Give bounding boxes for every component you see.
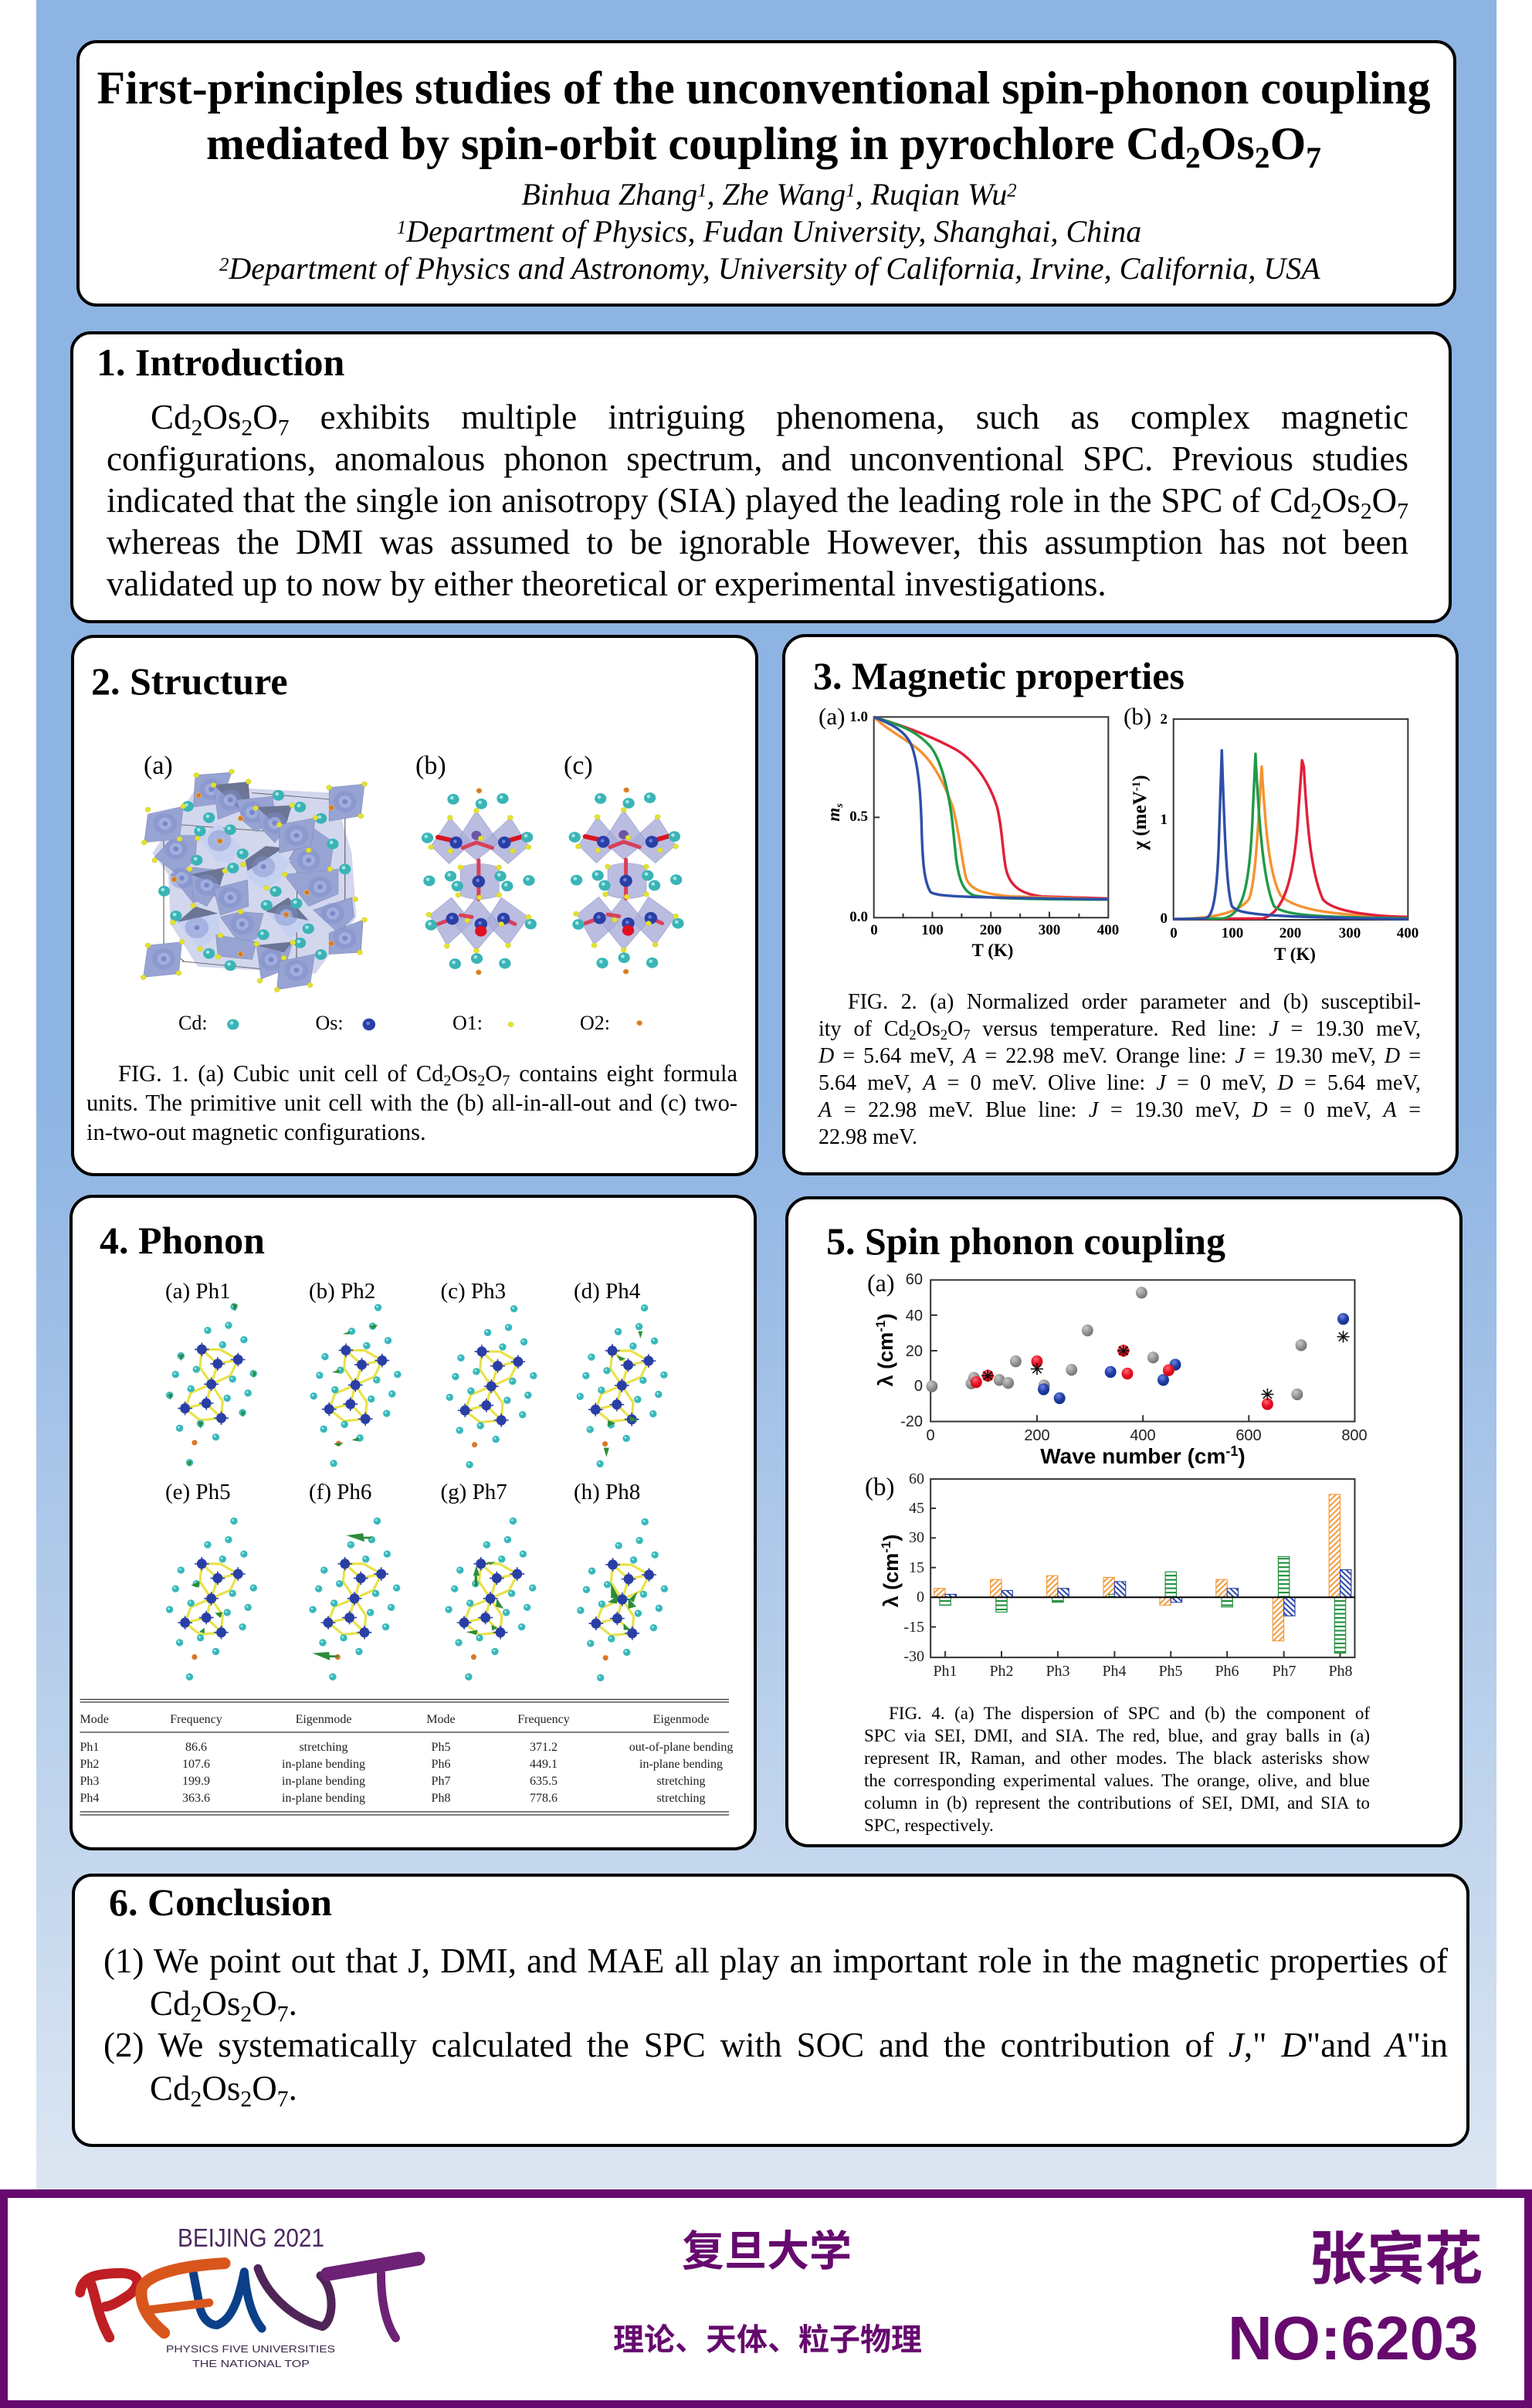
caption: figure 4: represent IR, Raman, and other modes. The black asterisks show [864,1748,1370,1768]
table: phonon modes: Ph6 [432,1758,450,1771]
table: phonon modes: Ph4 [80,1792,99,1805]
subfigure labels: (c) [564,751,593,780]
legend: atom species: Os: [315,1012,344,1034]
caption: figure 2: D = 5.64 meV, A = 22.98 meV. Orange line: J = 19.30 meV, D = [819,1044,1421,1068]
chart: normalized order parameter (a): 1.0 [849,709,868,725]
text block: conclusion items: Cd2Os2O7. [150,2069,297,2111]
figure: eight phonon mode structures: (a) Ph1 [165,1279,231,1304]
caption: figure 2: 5.64 meV, A = 0 meV. Olive line: J = 0 meV, D = 5.64 meV, [819,1071,1421,1095]
chart: normalized order parameter (a): 100 [921,922,944,938]
caption: figure 2: FIG. 2. (a) Normalized order parameter and (b) susceptibil- [848,990,1421,1014]
chart: SPC dispersion scatter (a) [867,1269,1368,1468]
caption: figure 4: SPC via SEI, DMI, and SIA. The red, blue, and gray balls in (a) [864,1726,1370,1745]
chart: SPC components bar chart (b): Ph6 [1215,1663,1239,1680]
chart: susceptibility (b): T (K) [1274,945,1316,964]
caption: figure 2: 22.98 meV. [819,1125,917,1149]
table: phonon modes: Ph5 [432,1741,450,1754]
chart: SPC dispersion scatter (a): ) [874,1314,897,1321]
chart: susceptibility (b): 200 [1279,925,1301,941]
chart: normalized order parameter (a): 0.0 [849,909,868,925]
panel: title [76,40,1456,307]
chart: SPC dispersion scatter (a): Wave number (cm [1040,1444,1225,1468]
chart: normalized order parameter (a) [819,703,1119,960]
heading: poster title [97,63,1431,175]
chart: normalized order parameter (a): T (K) [972,941,1013,960]
chart: normalized order parameter (a): 300 [1039,922,1060,938]
figure: eight phonon mode structures [165,1279,668,1681]
chart: SPC dispersion scatter (a): 60 [906,1271,923,1288]
text: university name: 复旦大学 [682,2227,852,2275]
chart: susceptibility (b) [1124,703,1418,964]
caption: figure 2: A = 22.98 meV. Blue line: J = 19.30 meV, D = 0 meV, A = [819,1098,1421,1122]
chart: SPC components bar chart (b) [865,1470,1354,1680]
text: poster number: NO:6203 [1228,2304,1479,2372]
table: phonon modes: Eigenmode [296,1713,351,1726]
table: phonon modes: 778.6 [530,1792,558,1805]
text block: introduction body: indicated that the single ion anisotropy (SIA) played the leading role in the SPC of Cd2Os2O7 [107,481,1408,524]
caption: figure 4: SPC, respectively. [864,1816,994,1835]
chart: SPC components bar chart (b): Ph5 [1158,1663,1183,1680]
caption: figure 2 [817,990,1421,1149]
logo: PFUNT Beijing 2021: PHYSICS FIVE UNIVERSITIES [166,2343,335,2355]
subfigure labels [144,751,593,780]
table: phonon modes: stretching [656,1792,706,1805]
figure: eight phonon mode structures: (h) Ph8 [574,1480,640,1504]
chart: SPC dispersion scatter (a): 0 [914,1378,923,1395]
chart: SPC components bar chart (b): Ph3 [1046,1663,1070,1680]
text block: introduction body [107,398,1408,603]
text block: conclusion items: (2) We systematically calculated the SPC with SOC and the contribution of J," D"and A"in [103,2026,1448,2064]
chart: SPC components bar chart (b): Ph1 [933,1663,958,1680]
caption: figure 1: FIG. 1. (a) Cubic unit cell of Cd2Os2O7 contains eight formula [118,1060,737,1090]
table: phonon modes: in-plane bending [639,1758,723,1771]
text block: conclusion items: Cd2Os2O7. [150,1984,297,2026]
chart: normalized order parameter (a): 400 [1097,922,1119,938]
table: phonon modes: 107.6 [182,1758,210,1771]
chart: SPC components bar chart (b): ) [880,1535,903,1541]
legend: atom species: O1: [452,1012,483,1034]
figure: eight phonon mode structures: (b) Ph2 [309,1279,375,1304]
caption: figure 2: ity of Cd2Os2O7 versus temperature. Red line: J = 19.30 meV, [819,1017,1421,1043]
logo: PFUNT Beijing 2021 [80,2223,419,2369]
chart: susceptibility (b): 1 [1160,812,1168,828]
logo: PFUNT Beijing 2021: BEIJING 2021 [178,2223,324,2252]
table: phonon modes: 86.6 [185,1741,207,1754]
panel: structure [71,635,758,1176]
table: phonon modes: in-plane bending [282,1775,365,1788]
chart: SPC components bar chart (b): Ph4 [1102,1663,1127,1680]
chart: SPC components bar chart (b): 0 [917,1589,924,1606]
chart: normalized order parameter (a): 0.5 [849,809,868,825]
chart: SPC dispersion scatter (a): ) [1238,1444,1246,1468]
figure: cubic unit cell (a) [141,769,368,992]
panel: magnetic properties [782,634,1459,1175]
chart: SPC components bar chart (b): Ph7 [1272,1663,1296,1680]
table: phonon modes: stretching [656,1775,706,1788]
text block: authors and affiliations: 1Department of Physics, Fudan University, Shanghai, China [397,214,1141,249]
panel: introduction [70,331,1452,623]
table: phonon modes: in-plane bending [282,1758,365,1771]
text block: authors and affiliations [219,177,1320,286]
figure: two-in-two-out configuration (c) [569,788,684,974]
heading: 3. Magnetic properties: 3. Magnetic properties [813,654,1185,697]
chart: SPC dispersion scatter (a): 20 [906,1343,923,1360]
table: phonon modes [80,1699,733,1815]
table: phonon modes: stretching [299,1741,348,1754]
text block: conclusion items: (1) We point out that J, DMI, and MAE all play an important role in the magnetic properties of [103,1942,1448,1980]
legend: atom species: O2: [580,1012,610,1034]
figure: eight phonon mode structures: (d) Ph4 [574,1279,641,1304]
figure: eight phonon mode structures: (e) Ph5 [165,1480,231,1504]
caption: figure 4 [864,1704,1370,1835]
caption: figure 4: FIG. 4. (a) The dispersion of SPC and (b) the component of [889,1704,1370,1723]
chart: susceptibility (b): 300 [1339,925,1361,941]
table: phonon modes: in-plane bending [282,1792,365,1805]
caption: figure 4: column in (b) represent the contributions of SEI, DMI, and SIA to [864,1793,1370,1813]
panel: footer [0,2189,1532,2408]
table: phonon modes: Ph3 [80,1775,99,1788]
figure: all-in-all-out configuration (b) [422,789,537,975]
table: phonon modes: Frequency [170,1713,222,1726]
chart: SPC dispersion scatter (a): -20 [900,1413,923,1430]
chart: SPC dispersion scatter (a): 200 [1024,1427,1050,1444]
chart: SPC components bar chart (b): 30 [909,1529,924,1546]
chart: normalized order parameter (a): m [824,808,843,822]
heading: 6. Conclusion: 6. Conclusion [109,1881,332,1924]
legend: atom species: Cd: [178,1012,208,1034]
figure: eight phonon mode structures: (g) Ph7 [440,1480,507,1504]
caption: figure 1 [86,1060,737,1145]
chart: SPC components bar chart (b): λ (cm [880,1553,903,1607]
chart: susceptibility (b): ) [1130,775,1151,782]
table: phonon modes: Ph1 [80,1741,99,1754]
table: phonon modes: Frequency [517,1713,570,1726]
legend: atom species [178,1012,642,1034]
chart: normalized order parameter (a): (a) [819,703,845,730]
table: phonon modes: Mode [426,1713,456,1726]
caption: figure 1: units. The primitive unit cell with the (b) all-in-all-out and (c) two- [86,1090,737,1116]
table: phonon modes: 449.1 [530,1758,558,1771]
heading: 1. Introduction: 1. Introduction [97,341,344,384]
table: phonon modes: 635.5 [530,1775,558,1788]
text block: introduction body: configurations, anomalous phonon spectrum, and unconventional SPC. Previous studies [107,439,1408,478]
chart: normalized order parameter (a): 200 [980,922,1002,938]
table: phonon modes: Ph8 [432,1792,450,1805]
table: phonon modes: Ph7 [432,1775,450,1788]
table: phonon modes: Mode [80,1713,109,1726]
heading: 2. Structure: 2. Structure [91,660,288,703]
chart: SPC components bar chart (b): 60 [909,1470,924,1487]
chart: susceptibility (b): 0 [1160,911,1168,927]
chart: susceptibility (b): 0 [1170,925,1178,941]
table: phonon modes: 199.9 [182,1775,210,1788]
chart: SPC dispersion scatter (a): -1 [1225,1443,1238,1459]
caption: figure 1: in-two-out magnetic configurations. [86,1119,426,1145]
chart: susceptibility (b): 400 [1397,925,1418,941]
text block: introduction body: whereas the DMI was assumed to be ignorable However, this assumption has not been [107,523,1408,561]
text block: introduction body: validated up to now by either theoretical or experimental investigations. [107,565,1107,603]
table: phonon modes: 371.2 [530,1741,558,1754]
chart: SPC dispersion scatter (a): λ (cm [874,1332,897,1386]
chart: susceptibility (b): χ (meV [1130,791,1151,850]
chart: SPC dispersion scatter (a): -1 [873,1321,888,1332]
chart: susceptibility (b): -1 [1130,782,1143,791]
logo: PFUNT Beijing 2021: THE NATIONAL TOP [192,2358,310,2369]
chart: SPC components bar chart (b): (b) [865,1474,894,1501]
chart: SPC components bar chart (b): 15 [909,1559,924,1576]
text block: authors and affiliations: 2Department of Physics and Astronomy, University of California, Irvine, California, USA [219,251,1320,286]
subfigure labels: (a) [144,751,173,780]
panel: spin phonon coupling [785,1196,1463,1847]
heading: poster title: mediated by spin-orbit coupling in pyrochlore Cd2Os2O7 [206,118,1321,175]
chart: SPC dispersion scatter (a): 0 [926,1427,935,1444]
figure: eight phonon mode structures: (f) Ph6 [309,1480,371,1504]
table: phonon modes: out-of-plane bending [629,1741,733,1754]
text block: introduction body: Cd2Os2O7 exhibits multiple intriguing phenomena, such as complex magnetic [151,398,1408,440]
text: presenter name: 张宾花 [1309,2227,1483,2291]
chart: susceptibility (b): (b) [1124,703,1151,730]
chart: SPC components bar chart (b): -1 [879,1541,893,1553]
chart: SPC dispersion scatter (a): (a) [867,1269,895,1297]
heading: 4. Phonon: 4. Phonon [100,1219,265,1262]
chart: susceptibility (b): 2 [1160,711,1168,727]
chart: normalized order parameter (a): s [834,803,846,809]
chart: SPC components bar chart (b): -30 [903,1648,924,1665]
panel: phonon [69,1195,757,1850]
heading: 5. Spin phonon coupling: 5. Spin phonon coupling [826,1219,1225,1263]
chart: SPC components bar chart (b): -15 [903,1619,924,1636]
chart: normalized order parameter (a): 0 [870,922,878,938]
chart: SPC components bar chart (b): 45 [909,1500,924,1517]
caption: figure 4: the corresponding experimental values. The orange, olive, and blue [864,1771,1370,1790]
chart: SPC dispersion scatter (a): 40 [906,1307,923,1324]
chart: susceptibility (b): 100 [1222,925,1243,941]
table: phonon modes: Ph2 [80,1758,99,1771]
chart: SPC dispersion scatter (a): 800 [1341,1427,1368,1444]
table: phonon modes: 363.6 [182,1792,210,1805]
heading: poster title: First-principles studies of the unconventional spin-phonon coupling [97,63,1431,114]
figure: eight phonon mode structures: (c) Ph3 [440,1279,506,1304]
chart: SPC components bar chart (b): Ph2 [989,1663,1014,1680]
table: phonon modes: Eigenmode [653,1713,709,1726]
text: field: 理论、天体、粒子物理 [613,2323,922,2357]
chart: SPC dispersion scatter (a): 600 [1235,1427,1262,1444]
text block: authors and affiliations: Binhua Zhang1, Zhe Wang1, Ruqian Wu2 [521,177,1017,212]
chart: SPC components bar chart (b): Ph8 [1328,1663,1353,1680]
panel: conclusion [72,1874,1469,2147]
chart: SPC dispersion scatter (a): 400 [1130,1427,1156,1444]
text block: conclusion items [103,1942,1448,2111]
subfigure labels: (b) [415,751,446,780]
